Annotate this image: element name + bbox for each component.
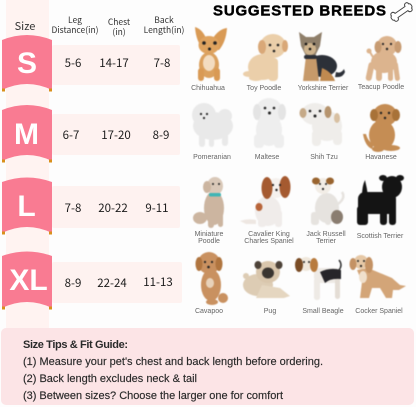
label: Miniature Poodle: Poodle	[198, 238, 220, 245]
label: Toy Poodle: Toy Poodle	[247, 85, 281, 92]
label: Cavalier King Charles Spaniel: Charles Spaniel	[244, 238, 294, 245]
dog: Toy Poodle	[243, 34, 288, 81]
row: size L: 20-22	[98, 200, 128, 216]
row: size XL: 22-24	[97, 275, 127, 291]
icon: bone	[389, 1, 414, 23]
dog: Miniature Poodle	[193, 177, 224, 228]
dog: Yorkshire Terrier	[299, 32, 345, 81]
row: size L: 9-11	[145, 200, 169, 216]
column heading: size: Size	[15, 18, 35, 34]
column heading: back length: Back	[154, 14, 174, 26]
dog: Maltese	[253, 98, 286, 148]
row: size S	[2, 35, 180, 92]
label: Miniature Poodle: Miniature	[195, 231, 223, 238]
label: Cavalier King Charles Spaniel: Cavalier King	[248, 231, 290, 238]
row: size XL: 8-9	[65, 275, 81, 291]
label: Maltese: Maltese	[255, 154, 279, 161]
column heading: chest: Chest	[108, 16, 131, 28]
label: Jack Russell Terrier: Terrier	[316, 238, 337, 245]
dog: Scottish Terrier	[357, 175, 404, 225]
column heading: chest: (in)	[112, 26, 126, 38]
dog: Cavalier King Charles Spaniel	[240, 176, 290, 227]
row: size M: 17-20	[101, 127, 131, 143]
row: size M: M	[14, 118, 39, 151]
column heading: leg distance: Leg	[68, 14, 82, 26]
row: size S: 5-6	[65, 55, 81, 71]
label: Teacup Poodle: Teacup Poodle	[358, 84, 404, 91]
title: SUGGESTED BREEDS	[213, 2, 386, 20]
size chart table	[2, 14, 185, 310]
tip 1: (1) Measure your pet's chest and back length before ordering.	[23, 356, 323, 368]
row: size L: L	[17, 190, 36, 223]
dog: Pomeranian	[192, 103, 233, 147]
label: Havanese: Havanese	[365, 154, 397, 161]
row: size XL	[2, 252, 182, 310]
label: Chihuahua: Chihuahua	[191, 85, 225, 92]
dog: Shih Tzu	[300, 103, 342, 146]
label: Pug: Pug	[264, 308, 276, 315]
label: Pomeranian: Pomeranian	[193, 154, 231, 161]
row: size XL: 11-13	[143, 274, 173, 290]
label: Cocker Spaniel: Cocker Spaniel	[355, 308, 403, 315]
label: Jack Russell Terrier: Jack Russell	[306, 231, 346, 238]
label: Cavapoo: Cavapoo	[195, 308, 223, 315]
column heading: back length: Length(in)	[144, 24, 185, 36]
tip 2: (2) Back length excludes neck & tail	[23, 373, 197, 385]
row: size S: 14-17	[99, 55, 129, 71]
dog: Jack Russell Terrier	[311, 178, 343, 225]
row: size S: S	[17, 47, 37, 80]
tips heading: Size Tips & Fit Guide:	[23, 339, 128, 351]
label: Shih Tzu: Shih Tzu	[310, 154, 338, 161]
row: size M	[2, 105, 180, 162]
dog: Cocker Spaniel	[350, 255, 406, 298]
dog: Chihuahua	[195, 27, 227, 81]
panel: size tips and fit guide	[1, 328, 414, 405]
label: Yorkshire Terrier: Yorkshire Terrier	[298, 85, 349, 92]
dog: Pug	[243, 261, 290, 298]
dog: Havanese	[363, 104, 400, 152]
row: size XL: XL	[9, 264, 48, 297]
row: size M: 6-7	[63, 127, 79, 143]
row: size M: 8-9	[153, 127, 169, 143]
tip 3: (3) Between sizes? Choose the larger one for comfort	[23, 390, 283, 402]
dog: Cavapoo	[196, 252, 228, 305]
row: size S: 7-8	[154, 55, 170, 71]
row: size L: 7-8	[65, 200, 81, 216]
dog: Teacup Poodle	[365, 36, 402, 81]
dog: Small Beagle	[295, 257, 341, 300]
row: size L	[2, 178, 180, 234]
column heading: leg distance: Distance(in)	[51, 24, 99, 36]
label: Scottish Terrier: Scottish Terrier	[357, 233, 404, 240]
label: Small Beagle: Small Beagle	[302, 308, 344, 315]
